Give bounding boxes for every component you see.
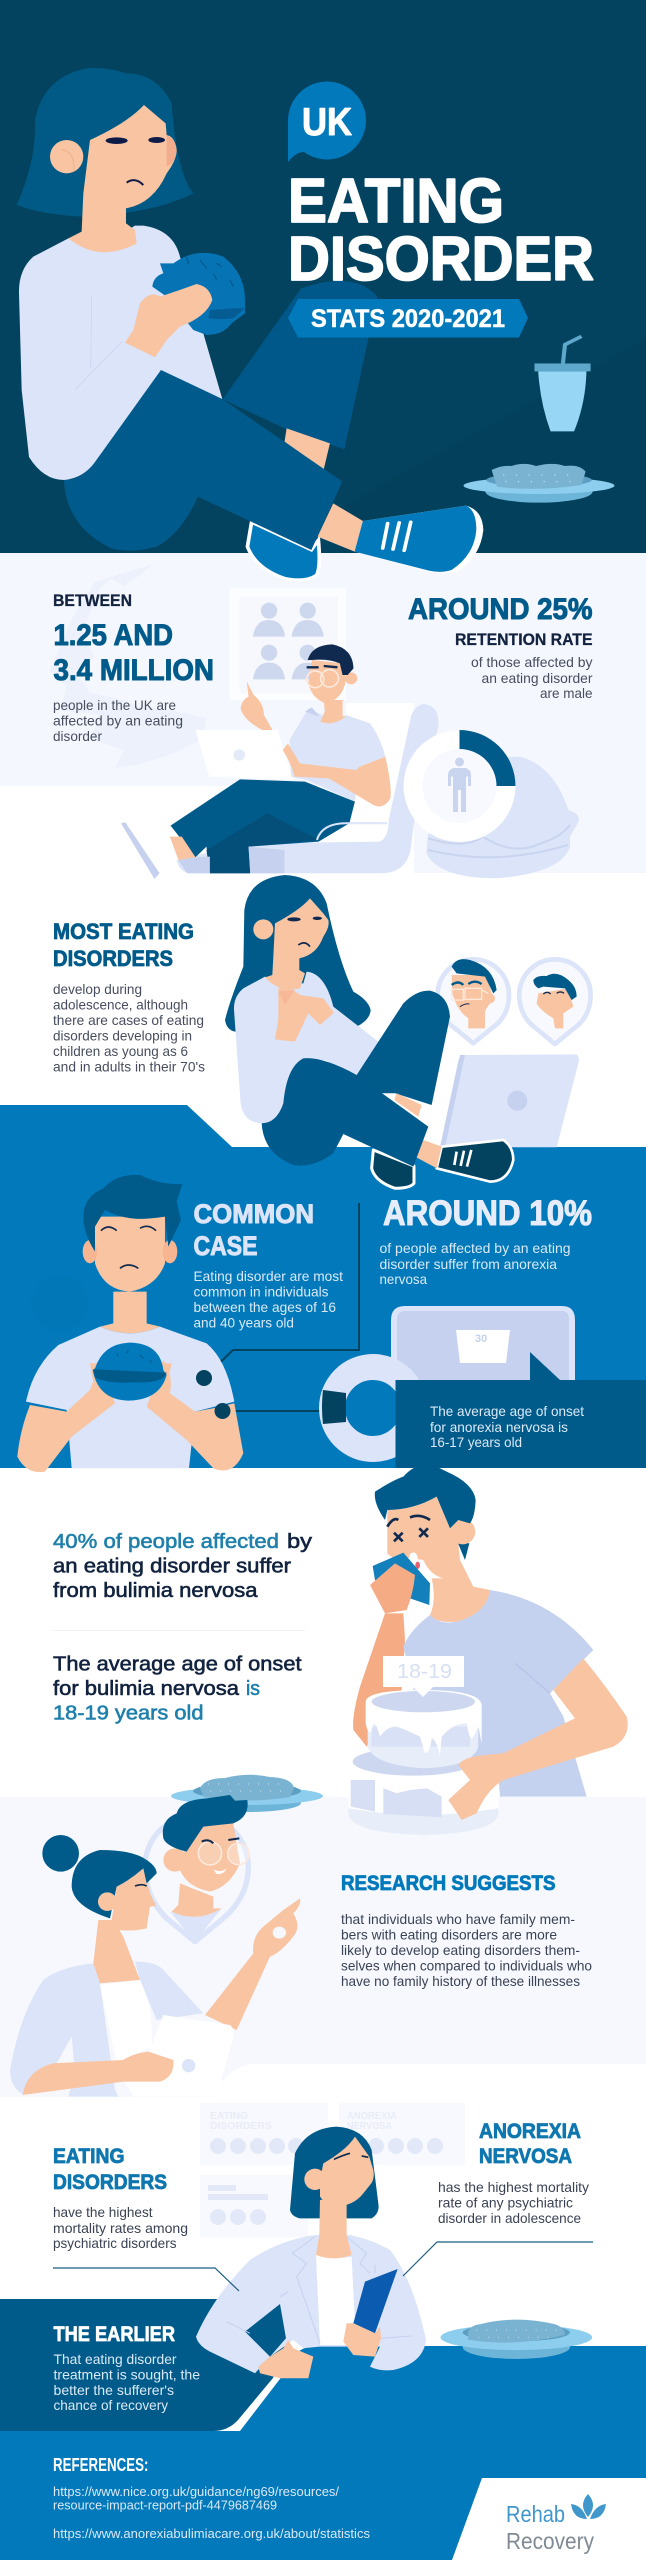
shoes: [372, 1140, 513, 1188]
stat text: around 25%: [408, 593, 593, 701]
text: bulimia statistics: by: [287, 1530, 313, 1553]
text: eating disorders mortality: [53, 2145, 188, 2251]
text: most eating disorders: and in adults in their 70's: [53, 1058, 205, 1074]
text: research suggests: selves when compared to individuals who: [341, 1958, 592, 1974]
stat text: around 25%: of those affected by: [471, 654, 592, 670]
illustration: woman with bun and man in bubble: [10, 1795, 300, 2097]
illustration: man with glasses in chair: [121, 644, 579, 879]
text: references: https://www.nice.org.uk/guidance/ng69/resources/: [53, 2484, 339, 2499]
stat text: between 1.25 and 3.4 million: affected by an eating: [53, 712, 183, 728]
text: most eating disorders: disorders developing in: [53, 1028, 192, 1044]
text: research suggests: likely to develop eating disorders them-: [341, 1942, 580, 1958]
legs: [262, 991, 450, 1168]
icon: plate of food: [171, 1775, 323, 1812]
callout: the earlier: treatment is sought, the: [54, 2366, 200, 2382]
icon: plate of food: [464, 464, 614, 503]
text: anorexia nervosa mortality: disorder in adolescence: [438, 2210, 581, 2226]
callout: anorexia onset age: 16-17 years old: [430, 1434, 522, 1450]
icon: weighing scale: 30: [475, 1333, 487, 1345]
illustration: man holding burger: [17, 1175, 243, 1472]
panel: header background: [0, 0, 646, 553]
stat text: around 25%: RETENTION RATE: [455, 630, 592, 649]
text: most eating disorders: there are cases of eating: [53, 1012, 204, 1028]
chart: 25% donut with person icon: [404, 730, 516, 842]
text: around 10%: disorder suffer from anorexia: [380, 1256, 557, 1272]
icon: plate of food: [440, 2320, 592, 2359]
subtitle banner: [288, 299, 528, 338]
text: anorexia nervosa mortality: [438, 2120, 589, 2226]
text: references: https://www.anorexiabulimiacare.org.uk/about/statistics: [53, 2526, 370, 2541]
panel: statistics background: [0, 553, 646, 873]
stat text: between 1.25 and 3.4 million: [53, 591, 214, 744]
text: common case: common in individuals: [194, 1284, 328, 1300]
text: eating disorders mortality: DISORDERS: [53, 2171, 167, 2194]
label: 18-19 age tag: 18-19: [397, 1661, 452, 1683]
text: most eating disorders: children as young as 6: [53, 1043, 188, 1059]
panel: common case blue band: [0, 1105, 646, 1468]
stat text: around 25%: an eating disorder: [482, 670, 593, 686]
text: bulimia statistics: [53, 1530, 313, 1724]
callout: the earlier: better the sufferer's: [54, 2382, 174, 2398]
text: anorexia nervosa mortality: has the highest mortality: [438, 2179, 589, 2195]
chart: age ring: [322, 1367, 414, 1449]
icon: avatar bubble man with glasses: [438, 959, 509, 1043]
stat text: around 25%: are male: [540, 685, 593, 701]
text: bulimia statistics: The average age of onset: [53, 1652, 302, 1676]
callout: the earlier: That eating disorder: [54, 2351, 177, 2367]
text: references: [53, 2455, 370, 2541]
stat text: between 1.25 and 3.4 million: people in the UK are: [53, 697, 176, 713]
far leg and legs: [64, 281, 483, 580]
text: research suggests: have no family history of these illnesses: [341, 1973, 580, 1989]
callout: the earlier: THE EARLIER: [54, 2323, 175, 2346]
stat text: between 1.25 and 3.4 million: BETWEEN: [53, 591, 132, 610]
text: most eating disorders: adolescence, although: [53, 996, 188, 1012]
icon: drink cup: [534, 336, 591, 431]
text: eating disorders mortality: psychiatric disorders: [53, 2235, 176, 2251]
title: [288, 167, 594, 294]
text: research suggests: [341, 1872, 592, 1989]
background: faint mortality charts: EATING: [210, 2111, 248, 2122]
text: research suggests: RESEARCH SUGGESTS: [341, 1872, 556, 1895]
subtitle banner: STATS 2020-2021: [311, 305, 505, 333]
icon: weighing scale: [391, 1306, 575, 1387]
text: common case: COMMON: [194, 1199, 314, 1229]
stat text: between 1.25 and 3.4 million: disorder: [53, 728, 102, 744]
illustration: man eating cake: [353, 1464, 628, 1820]
logo: Rehab Recovery: Recovery: [506, 2528, 594, 2554]
text: common case: Eating disorder are most: [194, 1268, 343, 1284]
text: bulimia statistics: from bulimia nervosa: [53, 1579, 258, 1602]
background: faint mortality charts: [200, 2103, 465, 2237]
illustration: woman with long hair and laptop: [225, 875, 579, 1188]
text: common case: [194, 1199, 343, 1330]
stat text: between 1.25 and 3.4 million: 3.4 MILLION: [54, 654, 214, 687]
text: bulimia statistics: for bulimia nervosa: [53, 1677, 240, 1700]
label: 18-19 age tag: [383, 1656, 464, 1697]
illustration: doctor with clipboard: [196, 2127, 426, 2378]
text: most eating disorders: [53, 919, 205, 1074]
title: EATING: [288, 167, 504, 236]
text: bulimia statistics: 40% of people affected: [53, 1530, 279, 1553]
panel: research background: [0, 1797, 646, 2097]
title: DISORDER: [288, 225, 594, 294]
text: most eating disorders: MOST EATING: [53, 919, 194, 944]
text: anorexia nervosa mortality: rate of any psychiatric: [438, 2194, 573, 2210]
text: common case: CASE: [194, 1231, 258, 1261]
callout: the earlier: chance of recovery: [54, 2397, 168, 2413]
sweater: [234, 972, 378, 1123]
icon: UK speech bubble: [288, 82, 366, 162]
text: eating disorders mortality: mortality rates among: [53, 2220, 188, 2236]
icon: UK speech bubble: UK: [302, 101, 352, 144]
face and hands: [253, 898, 334, 1042]
connector lines: [53, 2242, 593, 2291]
laptop: [440, 1054, 579, 1147]
illustration: layered cake: [348, 1690, 503, 1835]
background: faint mortality charts: ANOREXIA: [347, 2111, 397, 2122]
text: around 10%: [380, 1194, 592, 1287]
callout: the earlier: [0, 2299, 285, 2431]
callout: anorexia onset age: [396, 1352, 646, 1468]
stat text: between 1.25 and 3.4 million: 1.25 AND: [54, 619, 173, 652]
text: anorexia nervosa mortality: ANOREXIA: [479, 2120, 581, 2143]
logo: Rehab Recovery: [452, 2478, 646, 2560]
text: common case: and 40 years old: [194, 1314, 294, 1330]
text: bulimia statistics: an eating disorder suffer: [53, 1554, 291, 1578]
callout connector lines: [204, 1203, 359, 1411]
background: people panel: [230, 588, 346, 700]
callout: anorexia onset age: The average age of onset: [430, 1403, 584, 1419]
logo: Rehab Recovery: Rehab: [506, 2501, 565, 2527]
background: faint mortality charts: DISORDERS: [210, 2121, 272, 2132]
text: common case: between the ages of 16: [194, 1299, 336, 1315]
connector dots: [196, 1370, 230, 1419]
text: anorexia nervosa mortality: NERVOSA: [479, 2145, 572, 2168]
background: faint mortality charts: NERVOSA: [347, 2121, 392, 2132]
text: around 10%: nervosa: [380, 1271, 427, 1287]
illustration: woman with burger: [17, 68, 483, 580]
text: eating disorders mortality: EATING: [53, 2145, 124, 2168]
icon: avatar bubble young man: [519, 959, 591, 1044]
text: references: resource-impact-report-pdf-4479687469: [53, 2498, 277, 2512]
text: references: REFERENCES:: [53, 2455, 148, 2475]
hair: [225, 875, 371, 1032]
man in bubble: [145, 1795, 249, 1942]
woman: [10, 1835, 300, 2097]
stat text: around 25%: AROUND 25%: [408, 593, 592, 626]
panel: footer blue band: [0, 2346, 646, 2560]
text: bulimia statistics: 18-19 years old: [53, 1702, 204, 1724]
text: eating disorders mortality: have the highest: [53, 2204, 153, 2220]
text: most eating disorders: DISORDERS: [53, 946, 173, 971]
text: bulimia statistics: is: [246, 1677, 260, 1700]
background: UK map silhouette: [49, 564, 206, 768]
text: research suggests: bers with eating disorders are more: [341, 1926, 557, 1942]
text: research suggests: that individuals who have family mem-: [341, 1911, 575, 1927]
hair, head, body: [17, 68, 245, 480]
text: around 10%: of people affected by an eating: [380, 1240, 570, 1256]
text: around 10%: AROUND 10%: [383, 1194, 592, 1233]
text: most eating disorders: develop during: [53, 981, 142, 997]
callout: anorexia onset age: for anorexia nervosa is: [430, 1419, 568, 1435]
